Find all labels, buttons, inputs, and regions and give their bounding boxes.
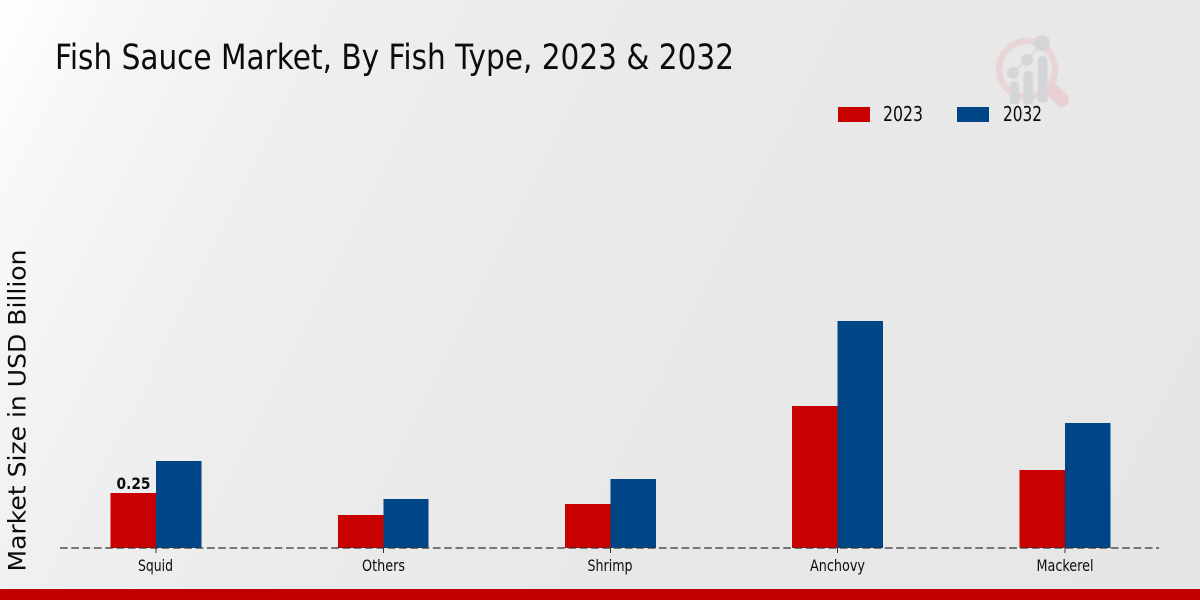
legend: 2023: 2023 xyxy=(883,102,923,126)
x axis labels: Mackerel xyxy=(1036,556,1094,575)
data label: 0.25 xyxy=(116,474,150,493)
bars: Squid xyxy=(110,461,202,548)
title: Fish Sauce Market, By Fish Type, 2023 & 2032 xyxy=(55,38,734,78)
bars: Shrimp xyxy=(565,479,656,548)
bar chart xyxy=(60,321,1159,575)
x axis labels: Anchovy xyxy=(810,556,865,575)
legend: 2032 xyxy=(957,102,1042,126)
x axis labels: Others xyxy=(362,556,405,575)
bars: Mackerel xyxy=(1020,423,1110,548)
x axis labels: Shrimp xyxy=(588,556,632,575)
bars: Others xyxy=(338,499,428,548)
y axis title: Market Size in USD Billion xyxy=(4,250,32,572)
x axis labels: Squid xyxy=(138,556,173,575)
legend xyxy=(838,102,1042,126)
legend: 2032: 2032 xyxy=(1003,102,1042,126)
legend: 2023 xyxy=(838,102,923,126)
x axis labels xyxy=(138,556,1094,575)
bars: Anchovy xyxy=(792,321,883,548)
footer bar xyxy=(0,589,1200,600)
icon: magnifier logo watermark xyxy=(999,35,1062,104)
